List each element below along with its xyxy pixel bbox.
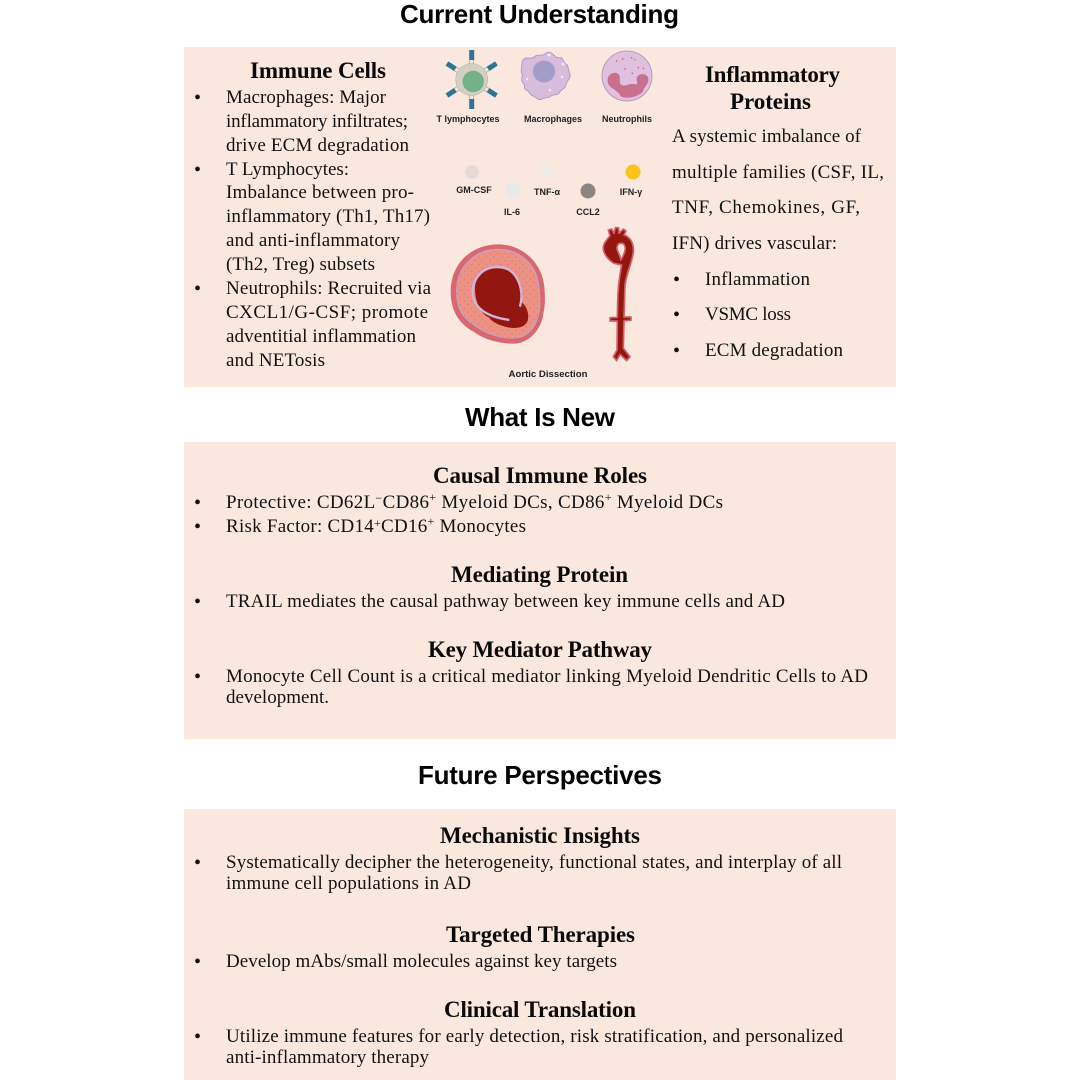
icon: CCL2: CCL2 xyxy=(576,207,600,217)
bullet: T lymphocytes: Imbalance between pro- xyxy=(226,182,414,203)
icon: T lymphocyte: T lymphocytes xyxy=(436,114,500,124)
icon: aortic cross-section xyxy=(451,244,545,344)
heading: targeted therapies: Targeted Therapies xyxy=(446,922,635,947)
bullet: risk factor: + xyxy=(427,514,434,528)
bullet: utilize immune features xyxy=(194,1026,844,1068)
heading: key mediator pathway: Key Mediator Pathway xyxy=(428,637,652,662)
bullet: risk factor: CD16 xyxy=(381,516,427,537)
bullet: protective: Myeloid DCs, CD86 xyxy=(436,492,604,513)
title: What Is New: What Is New xyxy=(465,402,616,432)
bullet: protective: Myeloid DCs xyxy=(612,492,723,513)
heading: inflammatory proteins xyxy=(705,62,840,114)
bullet: develop mAbs: Develop mAbs/small molecules against key targets xyxy=(226,951,617,972)
label: aortic dissection: Aortic Dissection xyxy=(509,369,588,380)
bullet: monocyte cell count: development. xyxy=(226,687,329,708)
icon: macrophage xyxy=(521,52,582,124)
heading: mediating protein: Mediating Protein xyxy=(451,562,628,587)
bullet: monocyte cell count: Monocyte Cell Count is a critical mediator linking Myeloid Dendritic Cells to AD xyxy=(226,666,868,687)
bullet list: effects: Inflammation xyxy=(705,269,810,290)
bullet: neutrophils xyxy=(194,278,432,371)
bullet: macrophages xyxy=(194,87,410,156)
bullet: macrophages: • xyxy=(194,87,201,109)
bullet: risk factor: Risk Factor: CD14 xyxy=(226,516,374,537)
icon: aorta xyxy=(603,228,633,361)
icon: TNF-alpha: TNF-α xyxy=(534,187,560,197)
bullet: systematically decipher xyxy=(194,852,842,894)
bullet: T lymphocytes: T Lymphocytes: xyxy=(226,159,349,180)
bullet: protective: − xyxy=(375,491,382,505)
bullet: utilize immune features: • xyxy=(194,1026,201,1048)
bullet: T lymphocytes: and anti-inflammatory xyxy=(226,230,400,251)
icon: macrophage: Macrophages xyxy=(524,114,582,124)
bullet: systematically decipher: immune cell populations in AD xyxy=(226,873,471,894)
bullet: T lymphocytes: • xyxy=(194,159,201,181)
heading: immune cells: Immune Cells xyxy=(250,58,386,83)
paragraph: systemic imbalance: IFN) drives vascular: xyxy=(672,233,837,254)
bullet: utilize immune features: anti-inflammatory therapy xyxy=(226,1047,430,1068)
immune cells text block xyxy=(194,58,432,371)
bullet: develop mAbs: • xyxy=(194,951,201,973)
bullet: monocyte cell count: • xyxy=(194,666,201,688)
bullet list: effects: • xyxy=(673,304,680,326)
bullet: systematically decipher: Systematically decipher the heterogeneity, functional states, and interplay of all xyxy=(226,852,842,873)
bullet: macrophages: drive ECM degradation xyxy=(226,135,410,156)
bullet: neutrophils: • xyxy=(194,278,201,300)
heading: causal immune roles: Causal Immune Roles xyxy=(433,463,647,488)
bullet: macrophages: Macrophages: Major xyxy=(226,87,387,108)
icon: GM-CSF xyxy=(456,165,492,195)
icon: GM-CSF: GM-CSF xyxy=(456,185,492,195)
bullet list: effects: • xyxy=(673,269,680,291)
bullet: T lymphocytes: (Th2, Treg) subsets xyxy=(226,254,375,275)
inflammatory proteins text block xyxy=(672,62,884,362)
paragraph: systemic imbalance: A systemic imbalance of xyxy=(672,126,862,147)
bullet: risk factor: + xyxy=(374,516,381,530)
bullet: T lymphocytes xyxy=(194,159,430,275)
panel: what is new xyxy=(184,442,896,739)
bullet: protective: + xyxy=(605,490,612,504)
bullet: risk factor: • xyxy=(194,516,201,538)
bullet: protective xyxy=(194,490,723,514)
bullet: T lymphocytes: inflammatory (Th1, Th17) xyxy=(226,206,430,227)
bullet: risk factor xyxy=(194,514,526,538)
title: Future Perspectives: Future Perspectives xyxy=(418,760,662,790)
bullet: neutrophils: Neutrophils: Recruited via xyxy=(226,278,432,299)
icon: IL-6: IL-6 xyxy=(504,207,520,217)
icon: T lymphocyte xyxy=(436,50,500,124)
bullet: TRAIL: TRAIL mediates the causal pathway between key immune cells and AD xyxy=(226,591,785,612)
icon: IFN-gamma: IFN-γ xyxy=(620,187,642,197)
bullet list: effects xyxy=(673,269,844,362)
paragraph: systemic imbalance: TNF, Chemokines, GF, xyxy=(672,197,860,218)
bullet list: effects: • xyxy=(673,340,680,362)
bullet: neutrophils: and NETosis xyxy=(226,350,325,371)
bullet: protective: CD86 xyxy=(383,492,429,513)
bullet: neutrophils: adventitial inflammation xyxy=(226,326,416,347)
bullet: neutrophils: CXCL1/G-CSF; promote xyxy=(226,302,428,323)
icon: CCL2 xyxy=(576,184,600,217)
icon: TNF-alpha xyxy=(534,164,560,197)
bullet: utilize immune features: Utilize immune features for early detection, risk stratification, and personalized xyxy=(226,1026,844,1047)
heading: mechanistic insights: Mechanistic Insights xyxy=(440,823,640,848)
bullet: monocyte cell count xyxy=(194,666,868,708)
bullet: protective: + xyxy=(429,490,436,504)
paragraph: systemic imbalance: multiple families (CSF, IL, xyxy=(672,162,884,183)
heading: inflammatory proteins: Inflammatory xyxy=(705,62,840,87)
icon: IFN-gamma xyxy=(620,164,642,197)
icon: neutrophil xyxy=(602,51,652,124)
bullet: protective: • xyxy=(194,492,201,514)
bullet: macrophages: inflammatory infiltrates; xyxy=(226,111,408,132)
bullet: systematically decipher: • xyxy=(194,852,201,874)
bullet: TRAIL: • xyxy=(194,591,201,613)
paragraph: systemic imbalance xyxy=(672,126,884,254)
icon: IL-6 xyxy=(504,182,521,217)
bullet list: effects: ECM degradation xyxy=(705,340,844,361)
heading: clinical translation: Clinical Translation xyxy=(444,997,636,1022)
panel: current understanding xyxy=(184,47,896,387)
bullet: risk factor: Monocytes xyxy=(434,516,526,537)
bullet list: effects: VSMC loss xyxy=(705,304,791,325)
icon: neutrophil: Neutrophils xyxy=(602,114,652,124)
heading: inflammatory proteins: Proteins xyxy=(730,89,811,114)
bullet: protective: Protective: CD62L xyxy=(226,492,375,513)
panel: future perspectives xyxy=(184,809,896,1080)
